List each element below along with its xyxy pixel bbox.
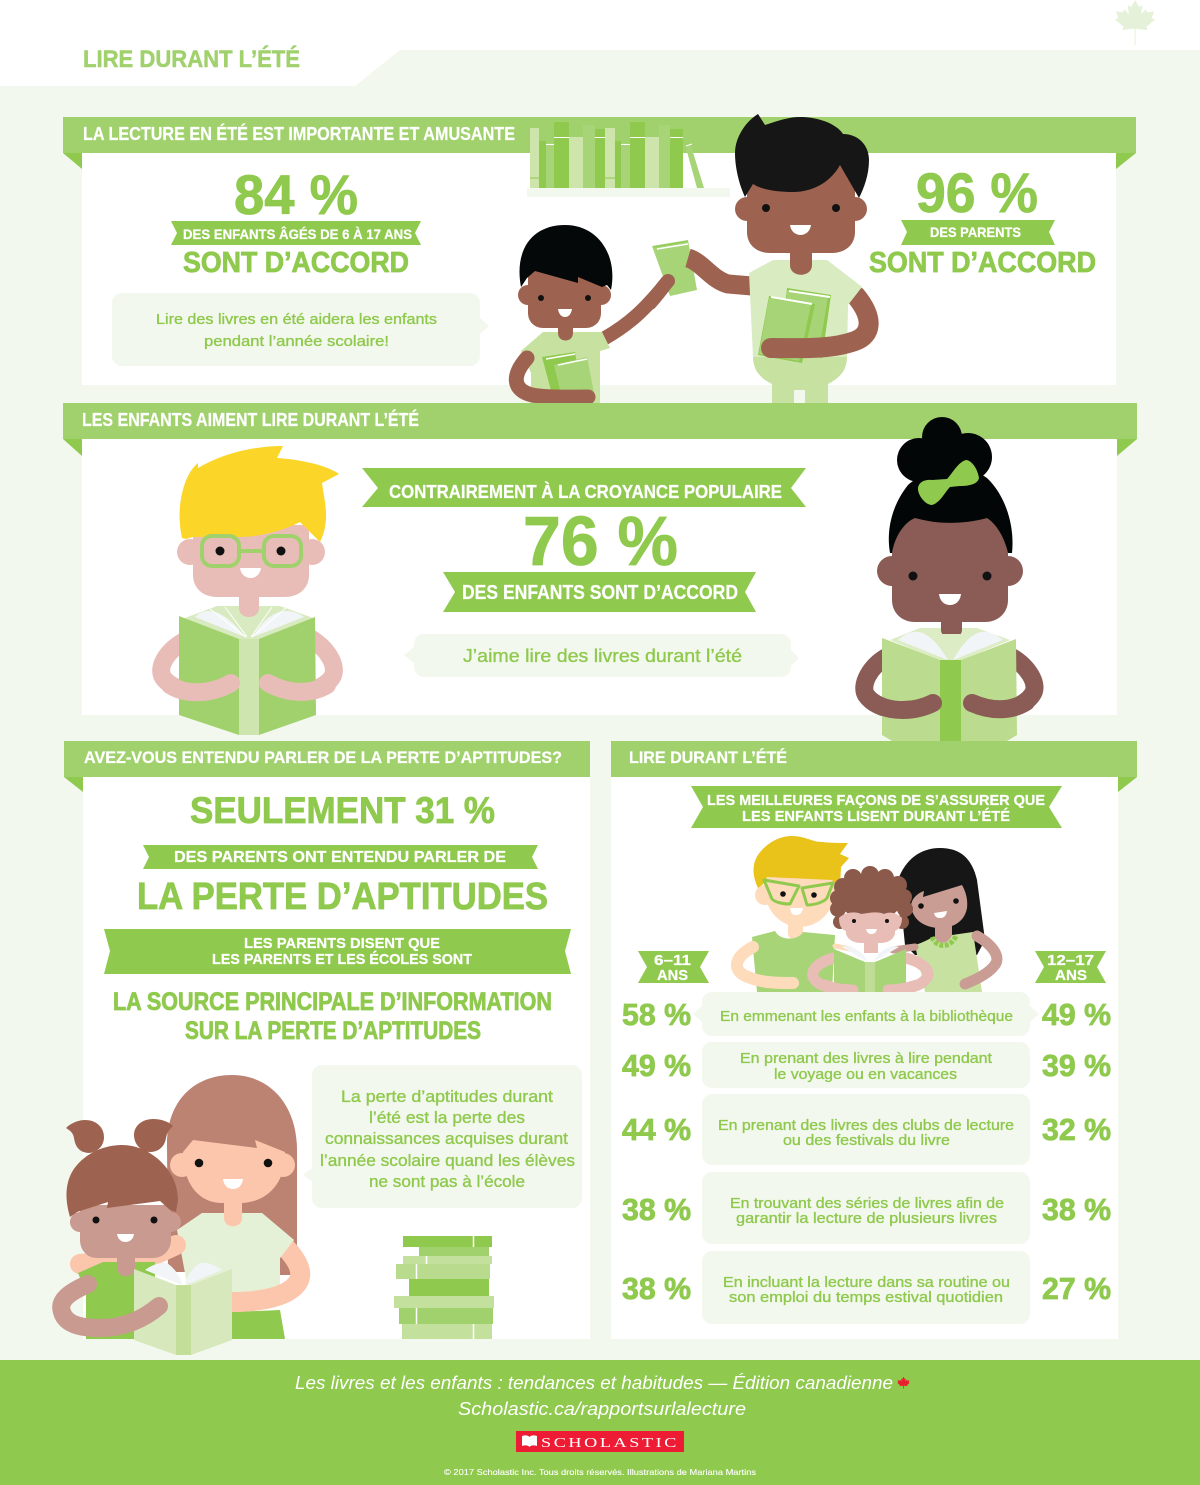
copyright: © 2017 Scholastic Inc. Tous droits réservés. Illustrations de Mariana Martins [444,1468,756,1477]
icon: red maple leaf [897,1377,910,1389]
ribbon: meilleures façons [691,786,1062,828]
row 2: 49 % [622,1048,691,1083]
row 2: 39 % [1042,1048,1111,1083]
panel: les enfants aiment lire [63,403,1137,715]
callout: j'aime lire [404,634,799,677]
callout: définition [303,1065,582,1208]
stat: 96 %: 96 % [916,161,1038,224]
footer title: Les livres et les enfants : tendances et habitudes — Édition canadienne [295,1373,893,1393]
ribbon: des parents ont entendu [143,845,538,869]
banner heading: LES ENFANTS AIMENT LIRE DURANT L’ÉTÉ [82,409,419,430]
icon: stack of books [394,1236,494,1339]
ribbon: 6-11 ans: 6–11 [654,952,691,969]
callout: j'aime lire: J’aime lire des livres durant l’été [463,646,742,666]
banner [64,741,590,777]
panel: la lecture en été [63,117,1136,385]
banner heading: AVEZ-VOUS ENTENDU PARLER DE LA PERTE D’APTITUDES? [84,748,562,767]
ribbon: des enfants [171,221,421,245]
icon: mother and daughter reading [61,1075,300,1355]
icon: blond boy reading [161,446,339,735]
icon: bookshelf [527,122,730,197]
row 3 [622,1094,1111,1165]
logo: scholastic [516,1431,684,1452]
ribbon: contrairement [362,468,806,507]
text: la perte d'aptitudes: LA PERTE D’APTITUDES [137,876,548,918]
callout: définition: connaissances acquises durant [325,1129,568,1148]
banner [611,741,1137,777]
row 4: En trouvant des séries de livres afin de [730,1195,1004,1212]
ribbon: des parents ont entendu: DES PARENTS ONT ENTENDU PARLER DE [174,849,506,866]
text: source principale [113,988,552,1045]
callout: définition: l’été est la perte des [369,1108,525,1127]
row 1: En emmenant les enfants à la bibliothèque [720,1008,1013,1025]
row 2: le voyage ou en vacances [774,1066,957,1083]
ribbon: des enfants sont d'accord: DES ENFANTS SONT D’ACCORD [462,582,738,604]
ribbon: meilleures façons: LES MEILLEURES FAÇONS DE S’ASSURER QUE [707,792,1045,809]
ribbon: meilleures façons: LES ENFANTS LISENT DURANT L’ÉTÉ [742,808,1010,825]
row 5: 38 % [622,1271,691,1306]
banner heading: LIRE DURANT L’ÉTÉ [629,748,787,767]
stat: seulement 31 %: SEULEMENT 31 % [190,790,495,831]
callout: définition: La perte d’aptitudes durant [341,1087,553,1106]
row 4 [622,1172,1111,1244]
footer [0,1360,1200,1485]
row 1 [622,992,1111,1036]
panel: lire durant l'été [611,741,1137,1339]
ribbon: 12-17 ans: 12–17 [1047,952,1094,969]
ribbon: des parents: DES PARENTS [930,224,1021,240]
row 5: 27 % [1042,1271,1111,1306]
ribbon: les parents disent: LES PARENTS DISENT QUE [244,935,440,952]
callout: lire des livres [112,293,489,366]
row 5 [622,1251,1111,1324]
row 5: En incluant la lecture dans sa routine ou [723,1274,1010,1291]
row 2 [622,1042,1111,1088]
icon: boy with book [516,225,697,403]
text: sont d'accord parents: SONT D’ACCORD [869,247,1096,279]
stat: 84 %: 84 % [234,163,358,226]
ribbon: 12-17 ans: ANS [1055,967,1087,984]
ribbon: les parents disent [104,929,571,974]
ribbon: des enfants sont d'accord [443,572,756,612]
row 3: En prenant des livres des clubs de lecture [718,1117,1014,1134]
row 2: En prenant des livres à lire pendant [740,1050,993,1067]
row 4: 38 % [1042,1192,1111,1227]
callout: définition: ne sont pas à l’école [369,1172,525,1191]
callout: lire des livres: Lire des livres en été aidera les enfants [156,311,437,328]
ribbon: 12-17 ans [1035,951,1106,984]
stat: 76 %: 76 % [523,502,678,580]
row 4: garantir la lecture de plusieurs livres [736,1210,997,1227]
icon: girl with bun reading [864,417,1035,741]
illustration: three children reading [737,836,997,992]
footer link: Scholastic.ca/rapportsurlalecture [458,1399,746,1419]
text: sont d'accord: SONT D’ACCORD [183,247,409,279]
panel: perte d'aptitudes [64,741,590,1339]
row 5: son emploi du temps estival quotidien [729,1289,1003,1306]
callout: lire des livres: pendant l’année scolaire! [204,333,389,350]
banner [63,117,1136,153]
row 1: 49 % [1042,997,1111,1032]
banner heading: LA LECTURE EN ÉTÉ EST IMPORTANTE ET AMUSANTE [83,123,515,144]
callout: définition: l’année scolaire quand les élèves [320,1151,575,1170]
banner [63,403,1137,439]
ribbon: les parents disent: LES PARENTS ET LES ÉCOLES SONT [212,951,472,968]
row 3: ou des festivals du livre [783,1132,950,1149]
row 3: 32 % [1042,1112,1111,1147]
row 1: 58 % [622,997,691,1032]
ribbon: 6-11 ans: ANS [657,967,688,984]
ribbon: 6-11 ans [638,951,709,984]
icon: maple leaf [1115,0,1155,45]
text: source principale: SUR LA PERTE D’APTITUDES [185,1017,481,1045]
row 3: 44 % [622,1112,691,1147]
title: LIRE DURANT L’ÉTÉ [83,45,300,73]
ribbon: des enfants: DES ENFANTS ÂGÉS DE 6 À 17 ANS [183,225,412,242]
ribbon: contrairement: CONTRAIREMENT À LA CROYANCE POPULAIRE [389,481,782,502]
logo: scholastic: SCHOLASTIC [541,1436,679,1451]
row 4: 38 % [622,1192,691,1227]
text: source principale: LA SOURCE PRINCIPALE D’INFORMATION [113,988,552,1016]
ribbon: des parents [901,220,1055,245]
icon: man with books [688,114,869,403]
